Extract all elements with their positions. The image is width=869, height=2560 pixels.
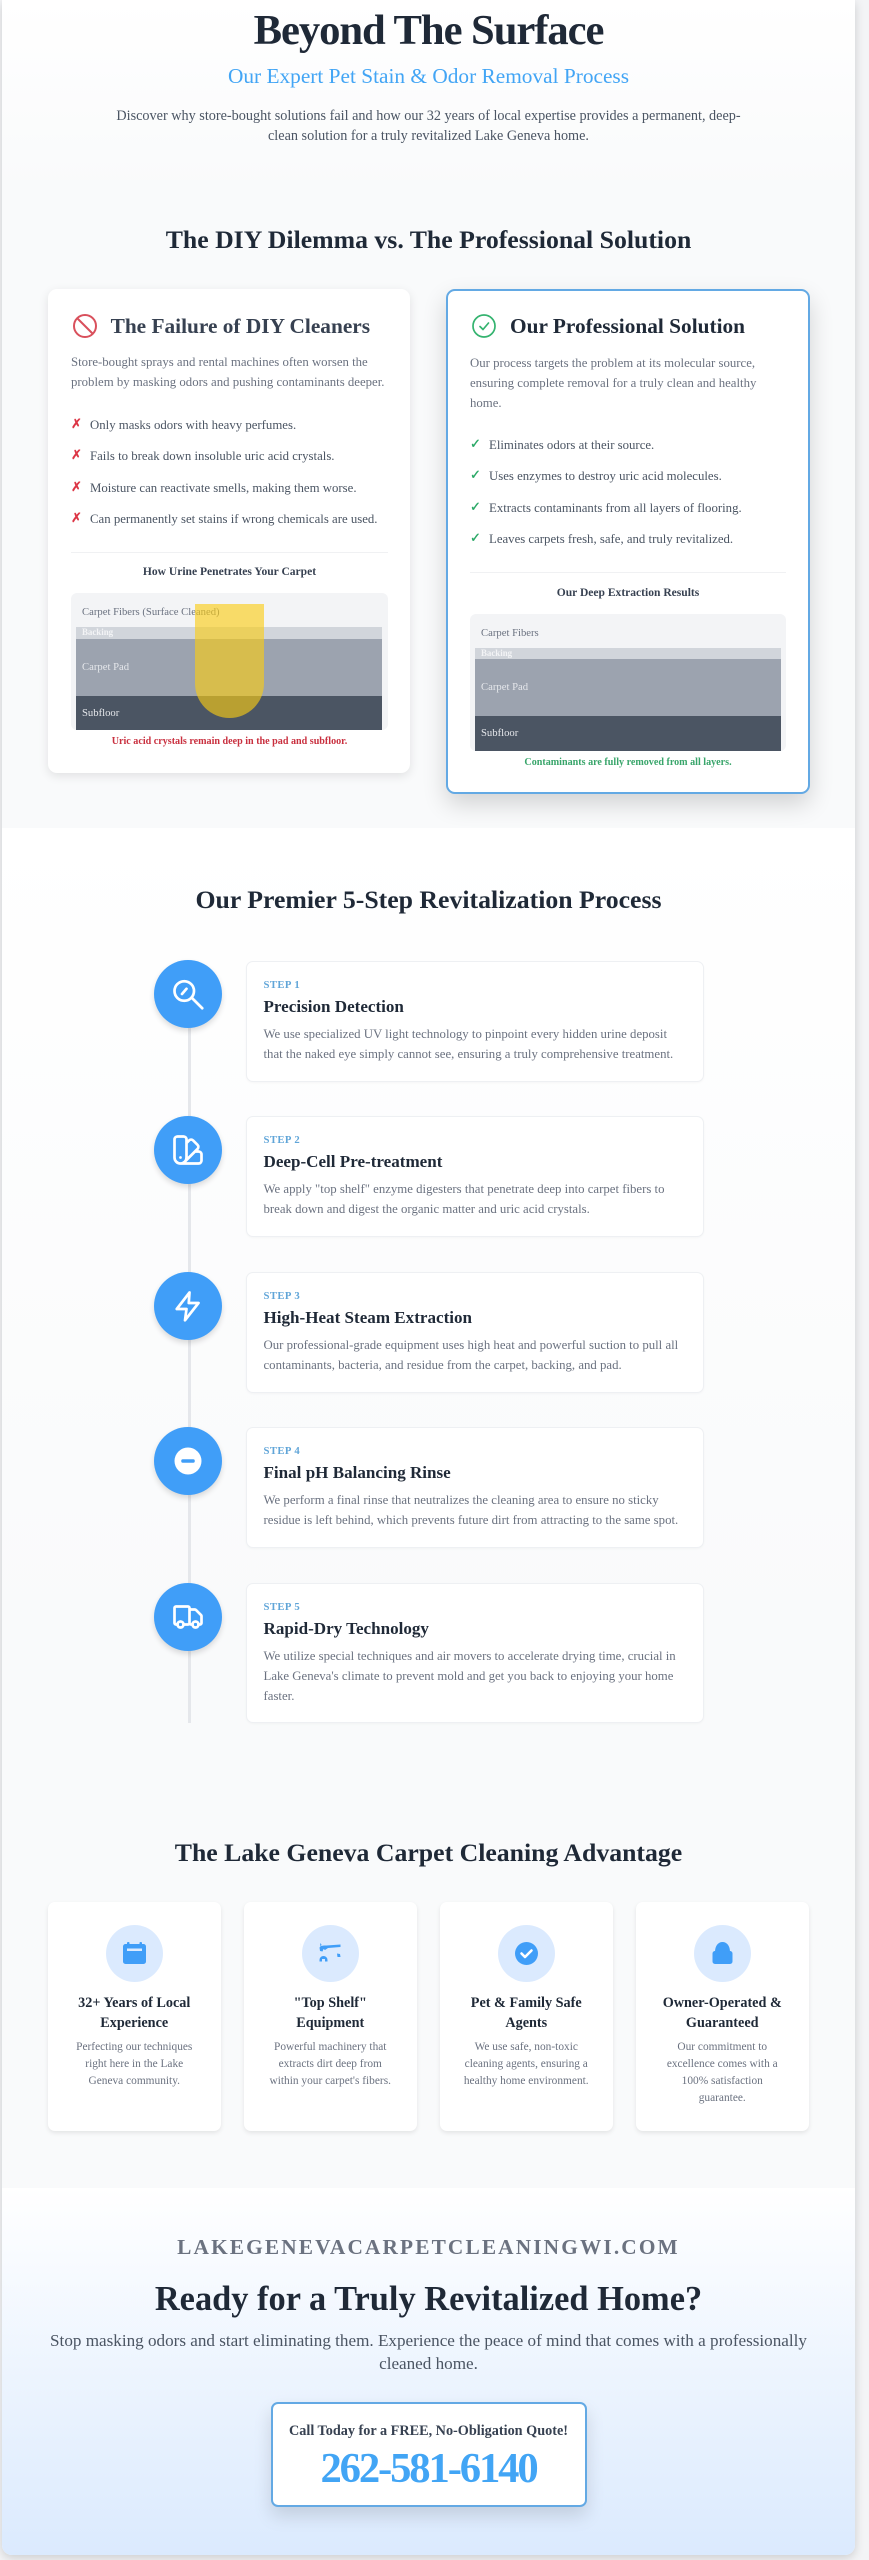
feature description: Geneva community. — [88, 2074, 180, 2086]
item 2: Uses enzymes to destroy uric acid molecules. — [489, 469, 722, 483]
feature description: Perfecting our techniques — [76, 2040, 192, 2052]
solution list — [470, 437, 742, 546]
step description: We perform a final rinse that neutralizes the cleaning area to ensure no sticky — [264, 1493, 659, 1507]
feature description: guarantee. — [699, 2092, 746, 2104]
feature title: Agents — [505, 2015, 547, 2031]
step label: STEP 5 — [264, 1601, 300, 1613]
step description: Lake Geneva's climate to prevent mold and get you back to enjoying your home — [264, 1669, 673, 1683]
item 2: ✗ — [71, 448, 82, 463]
step description — [264, 1338, 678, 1372]
item 1: Only masks odors with heavy perfumes. — [90, 418, 296, 432]
subtitle: Our Expert Pet Stain & Odor Removal Process — [228, 64, 629, 88]
icon: calendar — [106, 1925, 162, 1982]
step title: Deep-Cell Pre-treatment — [264, 1152, 442, 1171]
feature title: Pet & Family Safe — [471, 1995, 582, 2011]
step description: We use specialized UV light technology to pinpoint every hidden urine deposit — [264, 1026, 667, 1040]
icon: check badge — [498, 1925, 554, 1982]
step description — [264, 1182, 664, 1216]
step 2 card — [246, 1116, 704, 1237]
panel description: ensuring complete removal for a truly clean and healthy — [470, 376, 756, 390]
feature description: healthy home environment. — [464, 2074, 589, 2086]
step label: STEP 4 — [264, 1445, 300, 1457]
layer: subfloor — [76, 696, 382, 730]
intro paragraph: Discover why store-bought solutions fail and how our 32 years of local expertise provides a permanent, deep- — [116, 108, 741, 124]
diagram: clean layers — [470, 614, 786, 750]
feature title: "Top Shelf" — [294, 1995, 367, 2011]
step 2 icon: swatch — [154, 1116, 222, 1184]
layer: carpet pad — [475, 659, 781, 716]
feature title: 32+ Years of Local — [78, 1995, 190, 2011]
diagram: urine penetration layers — [71, 593, 388, 730]
item 3: Moisture can reactivate smells, making them worse. — [90, 481, 357, 495]
panel description — [71, 355, 384, 389]
feature title — [78, 1995, 190, 2031]
feature description: We use safe, non-toxic — [475, 2040, 578, 2052]
feature title — [294, 1995, 367, 2031]
panel description — [470, 356, 756, 410]
diagram caption: Contaminants are fully removed from all layers. — [524, 757, 732, 768]
item 2: ✓ — [470, 468, 481, 483]
icon: lock — [694, 1925, 750, 1982]
step 1 card — [246, 960, 704, 1082]
step title: Precision Detection — [264, 996, 404, 1016]
layer: backing: Backing — [82, 627, 113, 637]
panel description: Our process targets the problem at its molecular source, — [470, 356, 755, 370]
step title: Rapid-Dry Technology — [264, 1619, 429, 1638]
panel: professional solution — [446, 289, 810, 794]
panel heading: Our Professional Solution — [510, 314, 745, 338]
feature title — [471, 1995, 582, 2031]
feature description: Our commitment to — [677, 2040, 767, 2052]
item 1: ✓ — [470, 437, 481, 452]
step description: Our professional-grade equipment uses high heat and powerful suction to pull all — [264, 1338, 678, 1352]
feature title: Equipment — [296, 2015, 364, 2031]
intro paragraph: clean solution for a truly revitalized Lake Geneva home. — [268, 128, 589, 144]
feature card: equipment — [244, 1902, 416, 2130]
icon: prohibited — [73, 314, 97, 338]
step description: contaminants, bacteria, and residue from the carpet, backing, and pad. — [264, 1358, 622, 1372]
step title: Final pH Balancing Rinse — [264, 1463, 451, 1482]
urine stain — [194, 604, 264, 718]
feature description: cleaning agents, ensuring a — [465, 2058, 588, 2070]
item 1: Eliminates odors at their source. — [489, 438, 654, 452]
icon: broken wrench — [302, 1925, 358, 1982]
step 5 icon: truck — [154, 1583, 222, 1651]
step description — [264, 1493, 678, 1527]
step description: We utilize special techniques and air movers to accelerate drying time, crucial in — [264, 1649, 676, 1663]
step description — [264, 1026, 673, 1060]
panel description: home. — [470, 396, 502, 410]
heading: process: Our Premier 5-Step Revitalization Process — [195, 885, 662, 914]
layer: subfloor: Subfloor — [481, 727, 518, 739]
layer: subfloor: Subfloor — [82, 706, 119, 718]
layer: carpet pad — [76, 638, 382, 696]
phone number: 262-581-6140 — [320, 2445, 537, 2492]
feature title: Guaranteed — [686, 2015, 759, 2031]
diagram caption: Uric acid crystals remain deep in the pad and subfloor. — [112, 736, 347, 747]
feature description: within your carpet's fibers. — [270, 2074, 391, 2086]
layer: carpet pad: Carpet Pad — [481, 681, 528, 693]
diagram heading: How Urine Penetrates Your Carpet — [143, 565, 316, 578]
feature description: Powerful machinery that — [274, 2040, 386, 2052]
step label: STEP 2 — [264, 1134, 300, 1146]
feature description: right here in the Lake — [85, 2058, 183, 2070]
label: carpet fibers: Carpet Fibers — [481, 626, 539, 638]
CTA description — [50, 2330, 807, 2372]
CTA description: cleaned home. — [379, 2354, 478, 2372]
item 4: ✗ — [71, 511, 82, 526]
icon: check circle — [472, 314, 496, 338]
step 4 icon: minus circle — [154, 1427, 222, 1495]
feature description — [270, 2040, 391, 2086]
failure list — [71, 417, 378, 526]
step description: faster. — [264, 1689, 294, 1703]
layer: backing — [76, 627, 382, 638]
layer: backing — [475, 648, 781, 659]
diagram heading: Our Deep Extraction Results — [557, 586, 699, 599]
step 3 card — [246, 1272, 704, 1393]
feature card: guarantee — [636, 1902, 808, 2130]
step description — [264, 1649, 676, 1703]
section: 5-step process — [2, 828, 855, 1770]
label: carpet fibers: Carpet Fibers (Surface Cleaned) — [82, 606, 220, 618]
step label: STEP 1 — [264, 978, 300, 990]
timeline line — [188, 1028, 191, 1723]
feature description — [667, 2040, 778, 2104]
heading: DIY vs professional: The DIY Dilemma vs. The Professional Solution — [166, 225, 691, 254]
step 5 card — [246, 1583, 704, 1723]
step description: residue is left behind, which prevents future dirt from attracting to the same spot. — [264, 1513, 678, 1527]
step description: We apply "top shelf" enzyme digesters that penetrate deep into carpet fibers to — [264, 1182, 664, 1196]
panel: failure of DIY cleaners — [48, 289, 410, 773]
feature description — [76, 2040, 192, 2086]
step description: that the naked eye simply cannot see, ensuring a truly comprehensive treatment. — [264, 1046, 673, 1060]
CTA heading: Ready for a Truly Revitalized Home? — [155, 2280, 702, 2318]
item 4: Leaves carpets fresh, safe, and truly revitalized. — [489, 532, 733, 546]
item 2: Fails to break down insoluble uric acid crystals. — [90, 449, 335, 463]
website name: LAKEGENEVACARPETCLEANINGWI.COM — [177, 2235, 680, 2259]
CTA description: Stop masking odors and start eliminating them. Experience the peace of mind that comes with a professionally — [50, 2330, 807, 2350]
layer: backing: Backing — [481, 648, 512, 658]
title: Beyond The Surface — [254, 7, 603, 54]
feature title: Owner-Operated & — [663, 1995, 782, 2011]
step 1 icon: magnifier — [154, 960, 222, 1028]
feature description: excellence comes with a — [667, 2058, 778, 2070]
layer: carpet pad: Carpet Pad — [82, 660, 129, 672]
step 4 card — [246, 1427, 704, 1548]
panel description: Store-bought sprays and rental machines often worsen the — [71, 355, 368, 369]
callout text: Call Today for a FREE, No-Obligation Quote! — [289, 2423, 568, 2439]
layer: subfloor — [475, 716, 781, 750]
item 3: ✗ — [71, 480, 82, 495]
item 4: Can permanently set stains if wrong chemicals are used. — [90, 512, 378, 526]
step label: STEP 3 — [264, 1290, 300, 1302]
intro paragraph — [116, 108, 741, 144]
feature description — [464, 2040, 589, 2086]
feature description: extracts dirt deep from — [279, 2058, 382, 2070]
panel description: problem by masking odors and pushing contaminants deeper. — [71, 375, 384, 389]
heading: advantages: The Lake Geneva Carpet Cleaning Advantage — [175, 1838, 682, 1867]
section: advantages — [2, 1770, 855, 2188]
step description: break down and digest the organic matter and uric acid crystals. — [264, 1202, 590, 1216]
feature title: Experience — [100, 2015, 168, 2031]
section: header background and intro — [2, 0, 855, 828]
step title: High-Heat Steam Extraction — [264, 1308, 472, 1327]
feature description: 100% satisfaction — [682, 2074, 763, 2086]
item 4: ✓ — [470, 531, 481, 546]
phone callout — [270, 2402, 586, 2507]
item 3: ✓ — [470, 500, 481, 515]
feature card: safe agents — [440, 1902, 612, 2130]
feature title — [663, 1995, 782, 2031]
item 1: ✗ — [71, 417, 82, 432]
panel heading: The Failure of DIY Cleaners — [111, 314, 370, 338]
section: call to action — [2, 2188, 855, 2555]
item 3: Extracts contaminants from all layers of flooring. — [489, 501, 742, 515]
step 3 icon: bolt — [154, 1272, 222, 1340]
feature card: experience — [48, 1902, 220, 2130]
